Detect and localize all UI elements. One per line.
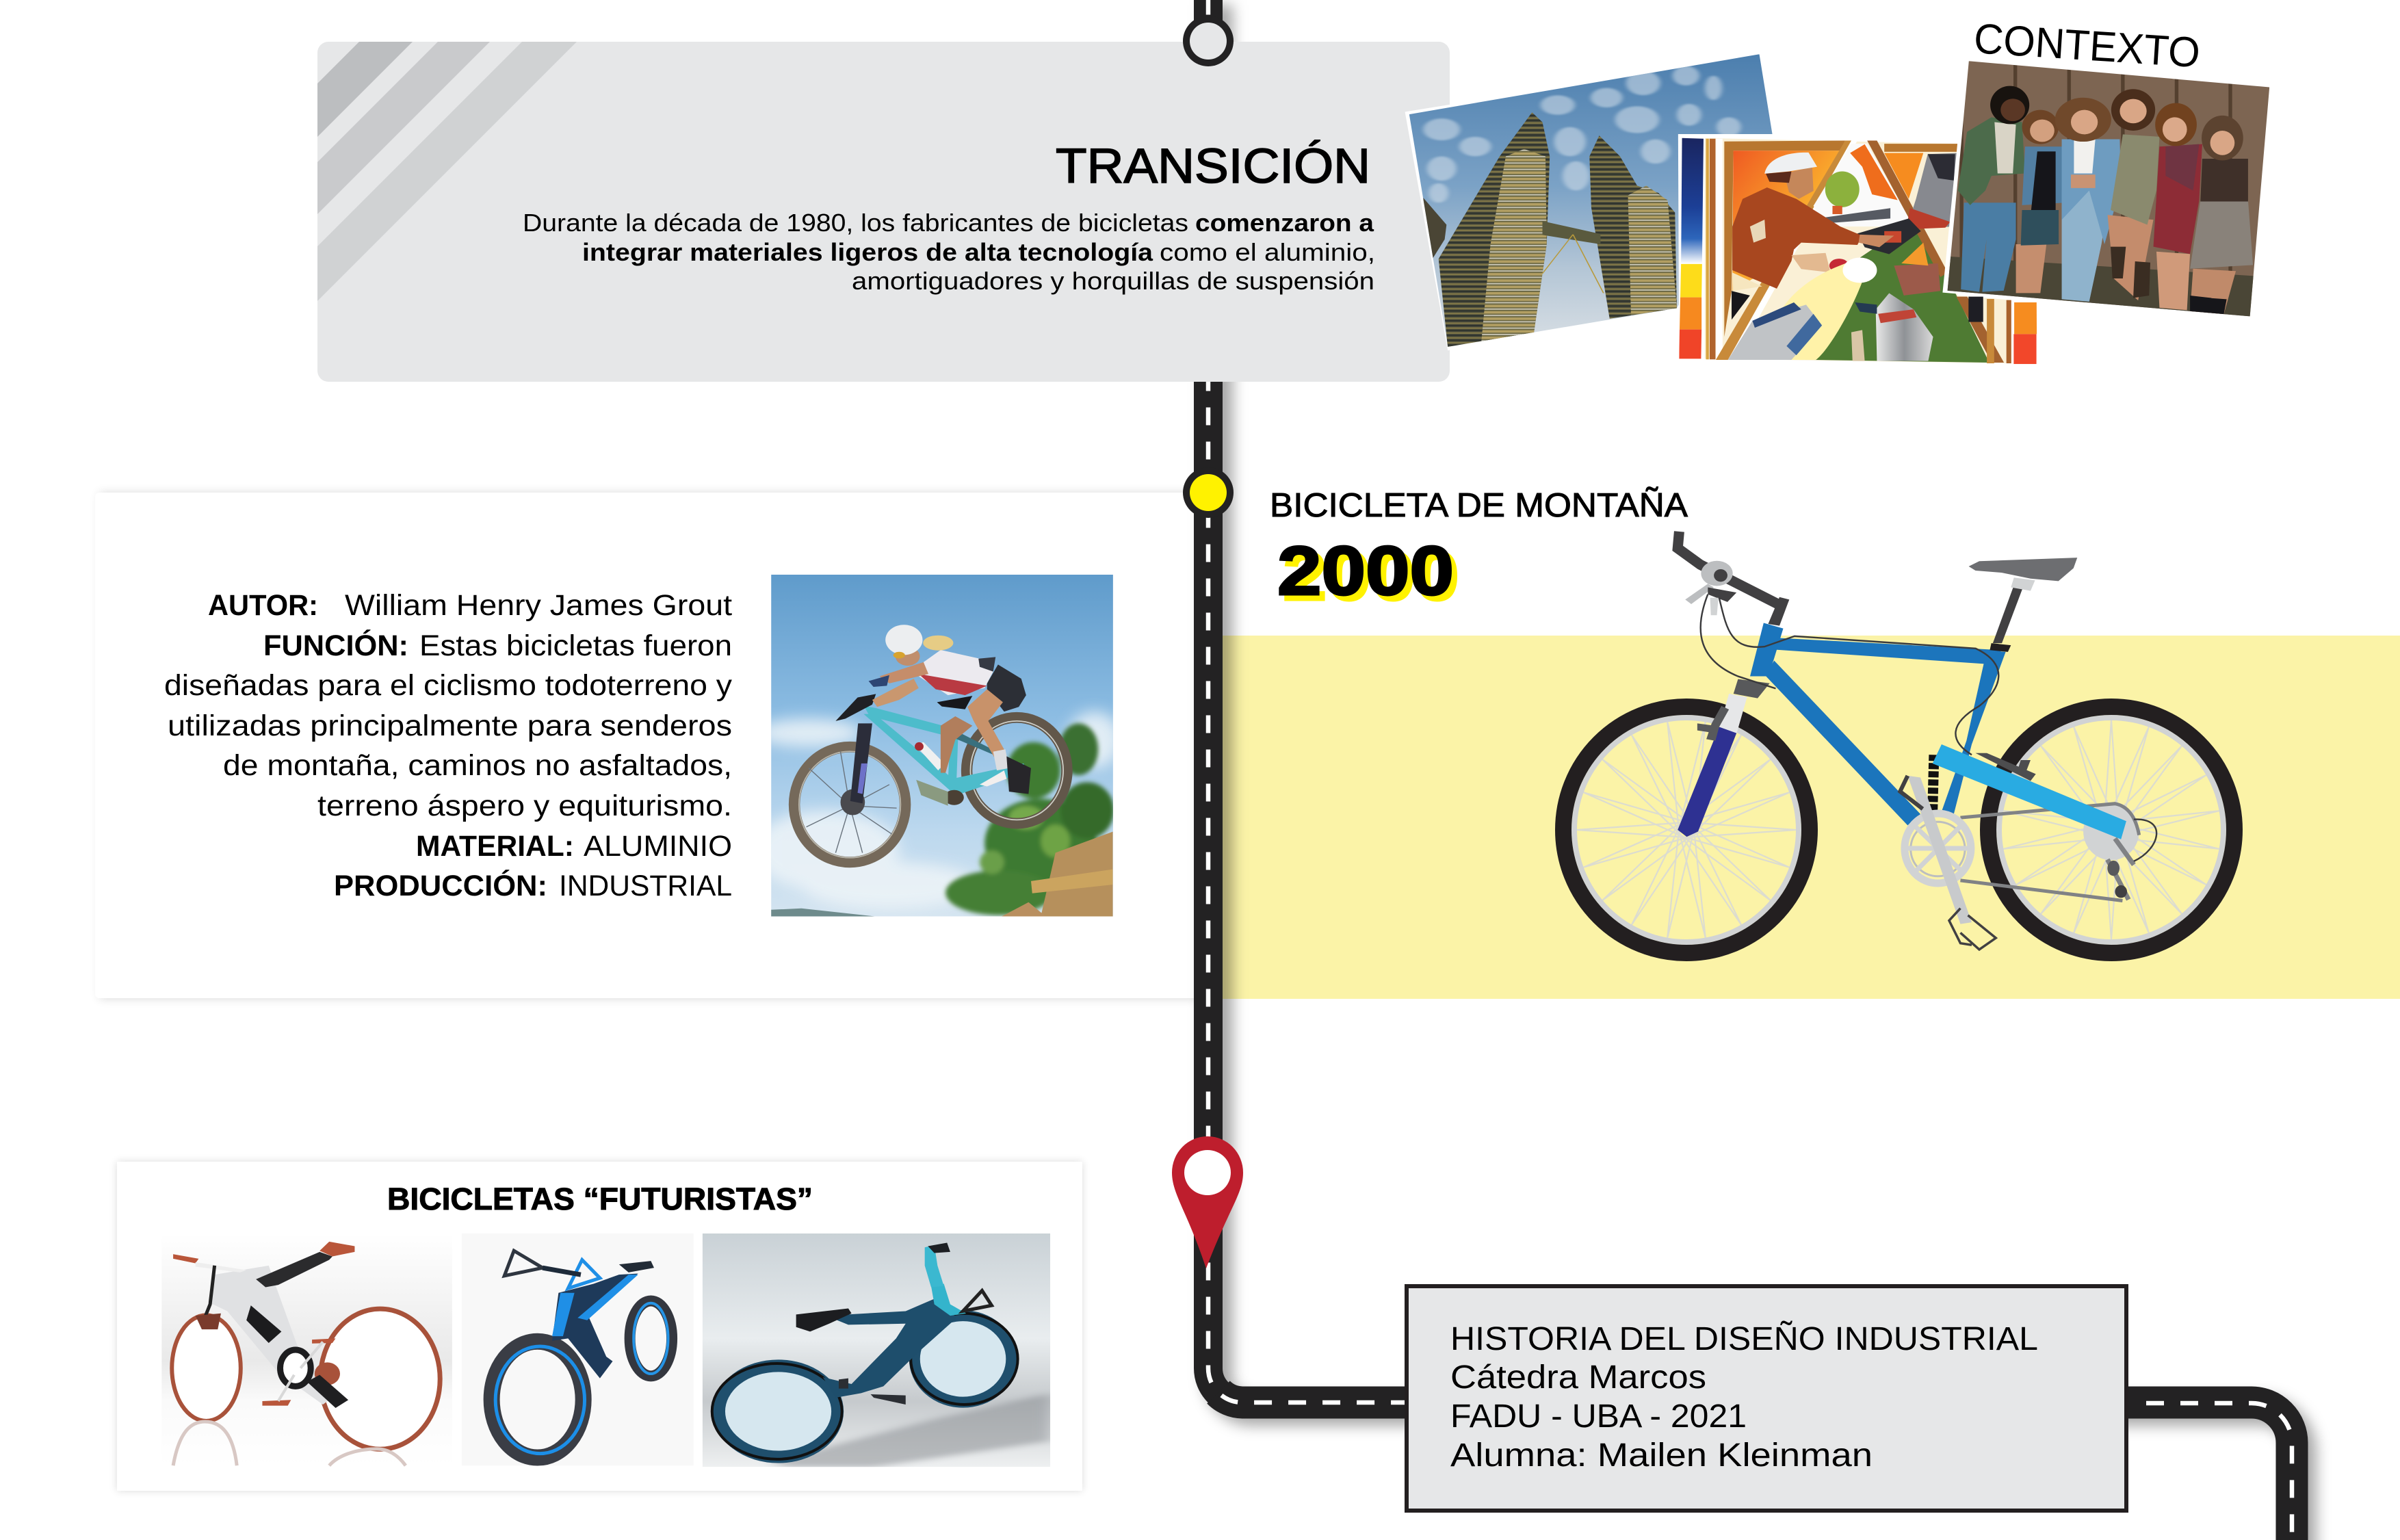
rocket right [1876, 293, 1933, 361]
text: author details: utilizadas principalmente para senderos [168, 709, 732, 742]
map pin [1172, 1136, 1243, 1268]
photo: twin towers [1405, 54, 1772, 350]
diagonal stripes [317, 42, 577, 301]
yellow band [1218, 636, 2400, 999]
text: author details: INDUSTRIAL [559, 870, 732, 902]
text: author details: ALUMINIO [584, 830, 732, 863]
text: course credits: FADU - UBA - 2021 [1450, 1398, 1747, 1435]
handlebar [1678, 532, 1785, 608]
text: author details: William Henry James Grout [345, 589, 732, 622]
text: author details [164, 589, 733, 902]
girl 6 [2190, 116, 2253, 315]
top tube [1772, 638, 2002, 664]
console [1857, 218, 1921, 254]
chain [1960, 804, 2139, 900]
text: transición description [523, 209, 1375, 295]
poster colour strip left [1679, 138, 1704, 358]
text: transición description: Durante la década de 1980, los fabricantes de bicicletas [523, 209, 1188, 237]
panel: course credits [1407, 1286, 2126, 1511]
text: transición description: amortiguadores y horquillas de suspensión [852, 267, 1374, 295]
rear wheel [1988, 707, 2234, 953]
down tube [1764, 661, 1920, 825]
node: top circle [1183, 16, 1234, 66]
lower frame and colour strip right [1956, 297, 2004, 363]
seat tube [1940, 650, 2006, 818]
photo: retro arcade poster [1678, 134, 2037, 365]
yellow glow [1767, 259, 1875, 360]
fork [1719, 694, 1747, 734]
photo: futuristic bike white and red [161, 1234, 452, 1465]
girl 2 [2016, 110, 2065, 293]
saddle [1969, 558, 2077, 581]
bike frame and components [1678, 532, 2156, 950]
tower right [1589, 135, 1677, 319]
green terrain [1814, 231, 1990, 363]
road [1208, 0, 2292, 1540]
road shadow [1218, 5, 2301, 1540]
heading: bicicletas futuristas: BICICLETAS “FUTURISTAS” [387, 1182, 813, 1216]
year: 2000: 2000 [1283, 538, 1459, 615]
brake cables [1701, 595, 2156, 861]
heading: contexto: CONTEXTO [1972, 15, 2202, 77]
bike frame [863, 706, 1026, 795]
text: author details: de montaña, caminos no asfaltados, [223, 749, 732, 782]
text: author details: PRODUCCIÓN: [334, 869, 547, 902]
frame diagonals [1716, 140, 1855, 360]
rider [869, 625, 1031, 794]
text: course credits: Cátedra Marcos [1450, 1359, 1706, 1396]
heading: transición: TRANSICIÓN [1056, 140, 1370, 194]
tower left [1439, 112, 1550, 347]
year: 2000: 2000 [1277, 533, 1454, 610]
front wheel [794, 747, 905, 862]
text: course credits: HISTORIA DEL DISEÑO INDUSTRIAL [1450, 1320, 2038, 1357]
rear wheel [967, 718, 1067, 824]
rear cassette [2083, 803, 2139, 860]
text: author details: Estas bicicletas fueron [419, 629, 732, 662]
text: author details: terreno áspero y equiturismo. [317, 789, 732, 822]
heading: bicicleta de montaña: BICICLETA DE MONTAÑA [1270, 487, 1688, 524]
text: author details: diseñadas para el ciclismo todoterreno y [164, 669, 733, 702]
illustration: blue mountain bicycle [1563, 532, 2234, 953]
text: transición description: como el aluminio, [1160, 238, 1375, 266]
front wheel [1563, 707, 1810, 953]
text: course credits: Alumna: Mailen Kleinman [1450, 1437, 1873, 1474]
spring [1933, 755, 1934, 811]
girl 4 [2108, 89, 2159, 300]
head tube [1750, 623, 1783, 677]
node: yellow circle [1183, 467, 1234, 518]
panel: author details [95, 493, 1203, 999]
grey machine top right [1913, 153, 1957, 227]
buildings [1894, 263, 1940, 296]
text: transición description: integrar materiales ligeros de alta tecnología [582, 238, 1153, 266]
panel: transición [317, 42, 1450, 382]
central white triangle [1814, 144, 1914, 226]
girl 1 [1958, 86, 2029, 292]
text: transición description: comenzaron a [1195, 209, 1374, 237]
brake lever [1685, 561, 1736, 615]
photo: mountain biker jumping [753, 575, 1121, 916]
photo: futuristic bike neon blue [462, 1234, 694, 1465]
girl 3 [2055, 98, 2121, 302]
text: course credits [1450, 1320, 2038, 1474]
rear derailleur [2107, 861, 2119, 876]
photo: group of girls [1936, 56, 2279, 320]
girl 5 [2154, 103, 2202, 310]
text: author details: AUTOR: [208, 589, 318, 622]
panel: futuristic bicycles [117, 1162, 1082, 1491]
seat post [1993, 587, 2023, 643]
pilot figure [1732, 187, 1862, 289]
rocket left [1728, 304, 1822, 360]
crankset [1900, 776, 1996, 950]
chainstay [1933, 744, 2126, 839]
text: author details: MATERIAL: [416, 830, 574, 863]
photo: futuristic bike teal [703, 1234, 1050, 1467]
text: author details: FUNCIÓN: [263, 629, 408, 662]
